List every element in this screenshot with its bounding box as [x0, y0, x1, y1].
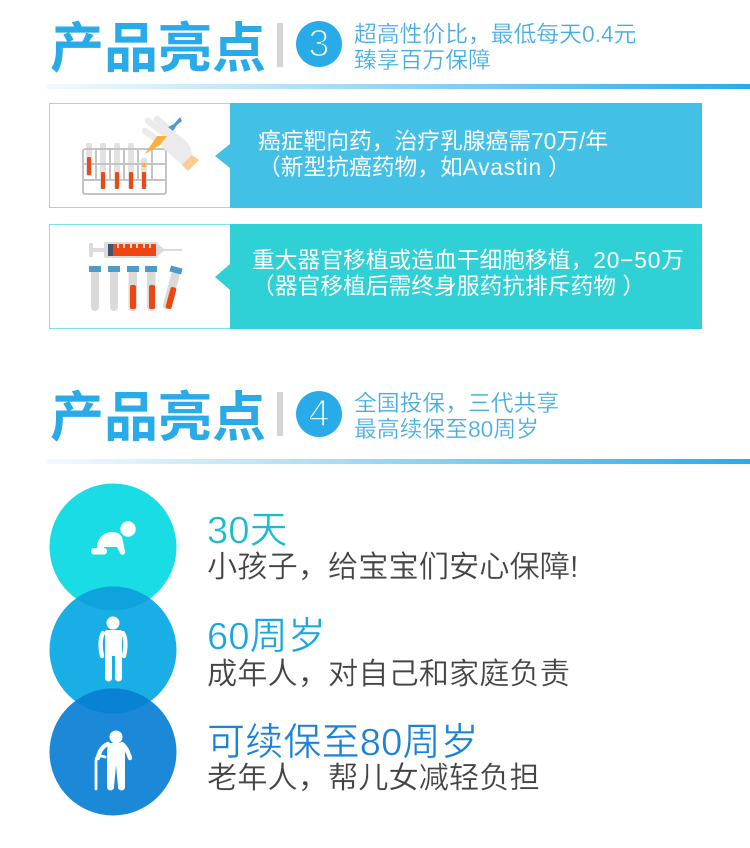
colored text block	[230, 103, 702, 208]
circle: adult	[50, 586, 176, 714]
circle: infant	[50, 484, 176, 610]
card text	[252, 247, 684, 299]
notch arrow	[215, 264, 230, 290]
card text: （器官移植后需终身服药抗排斥药物 ）	[252, 273, 645, 299]
card text: （新型抗癌药物，如Avastin ）	[258, 154, 571, 180]
title: 产品亮点	[50, 19, 266, 79]
card text: 癌症靶向药，治疗乳腺癌需70万/年	[258, 128, 608, 154]
section header 4	[46, 388, 750, 464]
subtitle: 最高续保至80周岁	[354, 416, 539, 442]
panel: targeted cancer drugs	[49, 103, 702, 208]
subtitle: 臻享百万保障	[354, 47, 491, 73]
icon: syringe and blood tubes	[89, 242, 182, 311]
card text: 重大器官移植或造血干细胞移植，20−50万	[252, 247, 684, 273]
image box	[49, 224, 231, 329]
text: 30 days	[207, 510, 578, 584]
subtitle: 超高性价比，最低每天0.4元	[354, 21, 636, 47]
text: 60 years	[207, 616, 570, 691]
heading: 可续保至80周岁	[207, 722, 479, 764]
heading: 60周岁	[207, 616, 326, 658]
notch arrow	[215, 144, 230, 168]
divider bar	[277, 392, 283, 436]
colored text block	[230, 224, 702, 329]
number badge 4: 4	[308, 393, 330, 435]
subtitle	[354, 390, 559, 442]
icon: test tube rack and glove	[82, 116, 199, 195]
section header 3	[46, 19, 750, 89]
description: 老年人，帮儿女减轻负担	[207, 762, 540, 795]
circle: elderly	[50, 688, 176, 816]
gradient rule	[46, 459, 750, 464]
number badge 4	[296, 391, 342, 437]
heading: 30天	[207, 510, 288, 552]
age circles	[50, 484, 176, 816]
description: 成年人，对自己和家庭负责	[207, 658, 570, 691]
card text	[258, 128, 608, 180]
text: renew to 80	[207, 722, 540, 795]
gradient rule	[46, 84, 750, 89]
subtitle: 全国投保，三代共享	[354, 390, 559, 416]
description: 小孩子，给宝宝们安心保障!	[207, 551, 578, 584]
panel: organ transplant	[49, 224, 702, 329]
title: 产品亮点	[50, 388, 266, 448]
number badge 3	[296, 21, 342, 67]
number badge 3: 3	[308, 23, 330, 65]
image box	[49, 103, 231, 208]
subtitle	[354, 21, 636, 73]
divider bar	[277, 23, 283, 67]
